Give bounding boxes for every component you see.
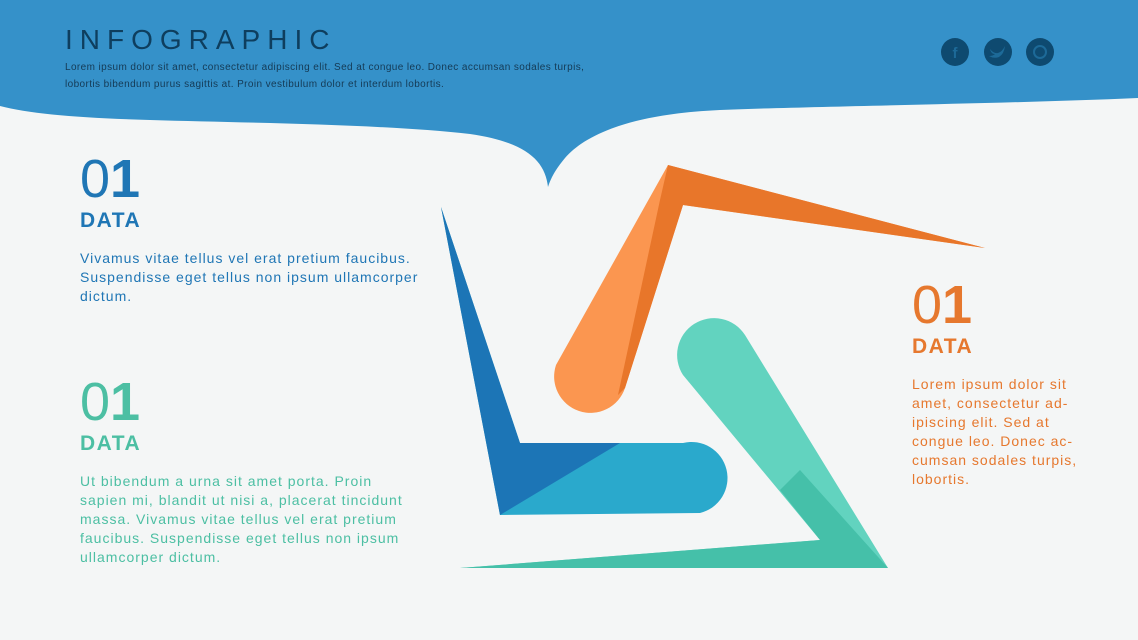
panel: data 1 blue: Vivamus vitae tellus vel erat pretium faucibus. xyxy=(80,250,411,266)
panel: data 1 blue: DATA xyxy=(80,209,141,232)
shape: blue xyxy=(441,207,728,515)
panel: data 1 blue: Suspendisse eget tellus non ipsum ullamcorper xyxy=(80,269,418,285)
panel: data 1 blue: 01 xyxy=(80,149,140,209)
panel: data 3 orange: congue leo. Donec ac- xyxy=(912,433,1073,449)
panel: data 3 orange: Lorem ipsum dolor sit xyxy=(912,376,1067,392)
panel: data 3 orange: cumsan sodales turpis, xyxy=(912,452,1077,468)
header text: lobortis bibendum purus sagittis at. Proin vestibulum dolor et interdum lobortis. xyxy=(65,79,444,90)
panel: data 2 teal: DATA xyxy=(80,432,141,455)
icons: social: f xyxy=(952,45,958,62)
panel: data 2 teal xyxy=(80,372,403,565)
icons: social xyxy=(941,38,1054,66)
panel: data 2 teal: sapien mi, blandit ut nisi a, placerat tincidunt xyxy=(80,492,403,508)
shape: teal xyxy=(460,318,888,568)
title: INFOGRAPHIC xyxy=(65,24,336,55)
panel: data 2 teal: Ut bibendum a urna sit amet porta. Proin xyxy=(80,473,372,489)
panel: data 3 orange: DATA xyxy=(912,335,973,358)
panel: data 2 teal: 01 xyxy=(80,372,140,432)
panel: data 3 orange xyxy=(912,275,1077,487)
panel: data 3 orange: 01 xyxy=(912,275,972,335)
shape: orange xyxy=(554,165,985,413)
panel: data 1 blue xyxy=(80,149,418,304)
panel: data 3 orange: amet, consectetur ad- xyxy=(912,395,1068,411)
panel: data 2 teal: massa. Vivamus vitae tellus vel erat pretium xyxy=(80,511,397,527)
panel: data 3 orange: ipiscing elit. Sed at xyxy=(912,414,1050,430)
header text: Lorem ipsum dolor sit amet, consectetur adipiscing elit. Sed at congue leo. Donec accumsan sodales turpis, xyxy=(65,62,584,73)
header band xyxy=(0,0,1138,187)
panel: data 2 teal: faucibus. Suspendisse eget tellus non ipsum xyxy=(80,530,399,546)
panel: data 1 blue: dictum. xyxy=(80,288,132,304)
header text xyxy=(65,62,584,90)
panel: data 3 orange: lobortis. xyxy=(912,471,970,487)
panel: data 2 teal: ullamcorper dictum. xyxy=(80,549,221,565)
